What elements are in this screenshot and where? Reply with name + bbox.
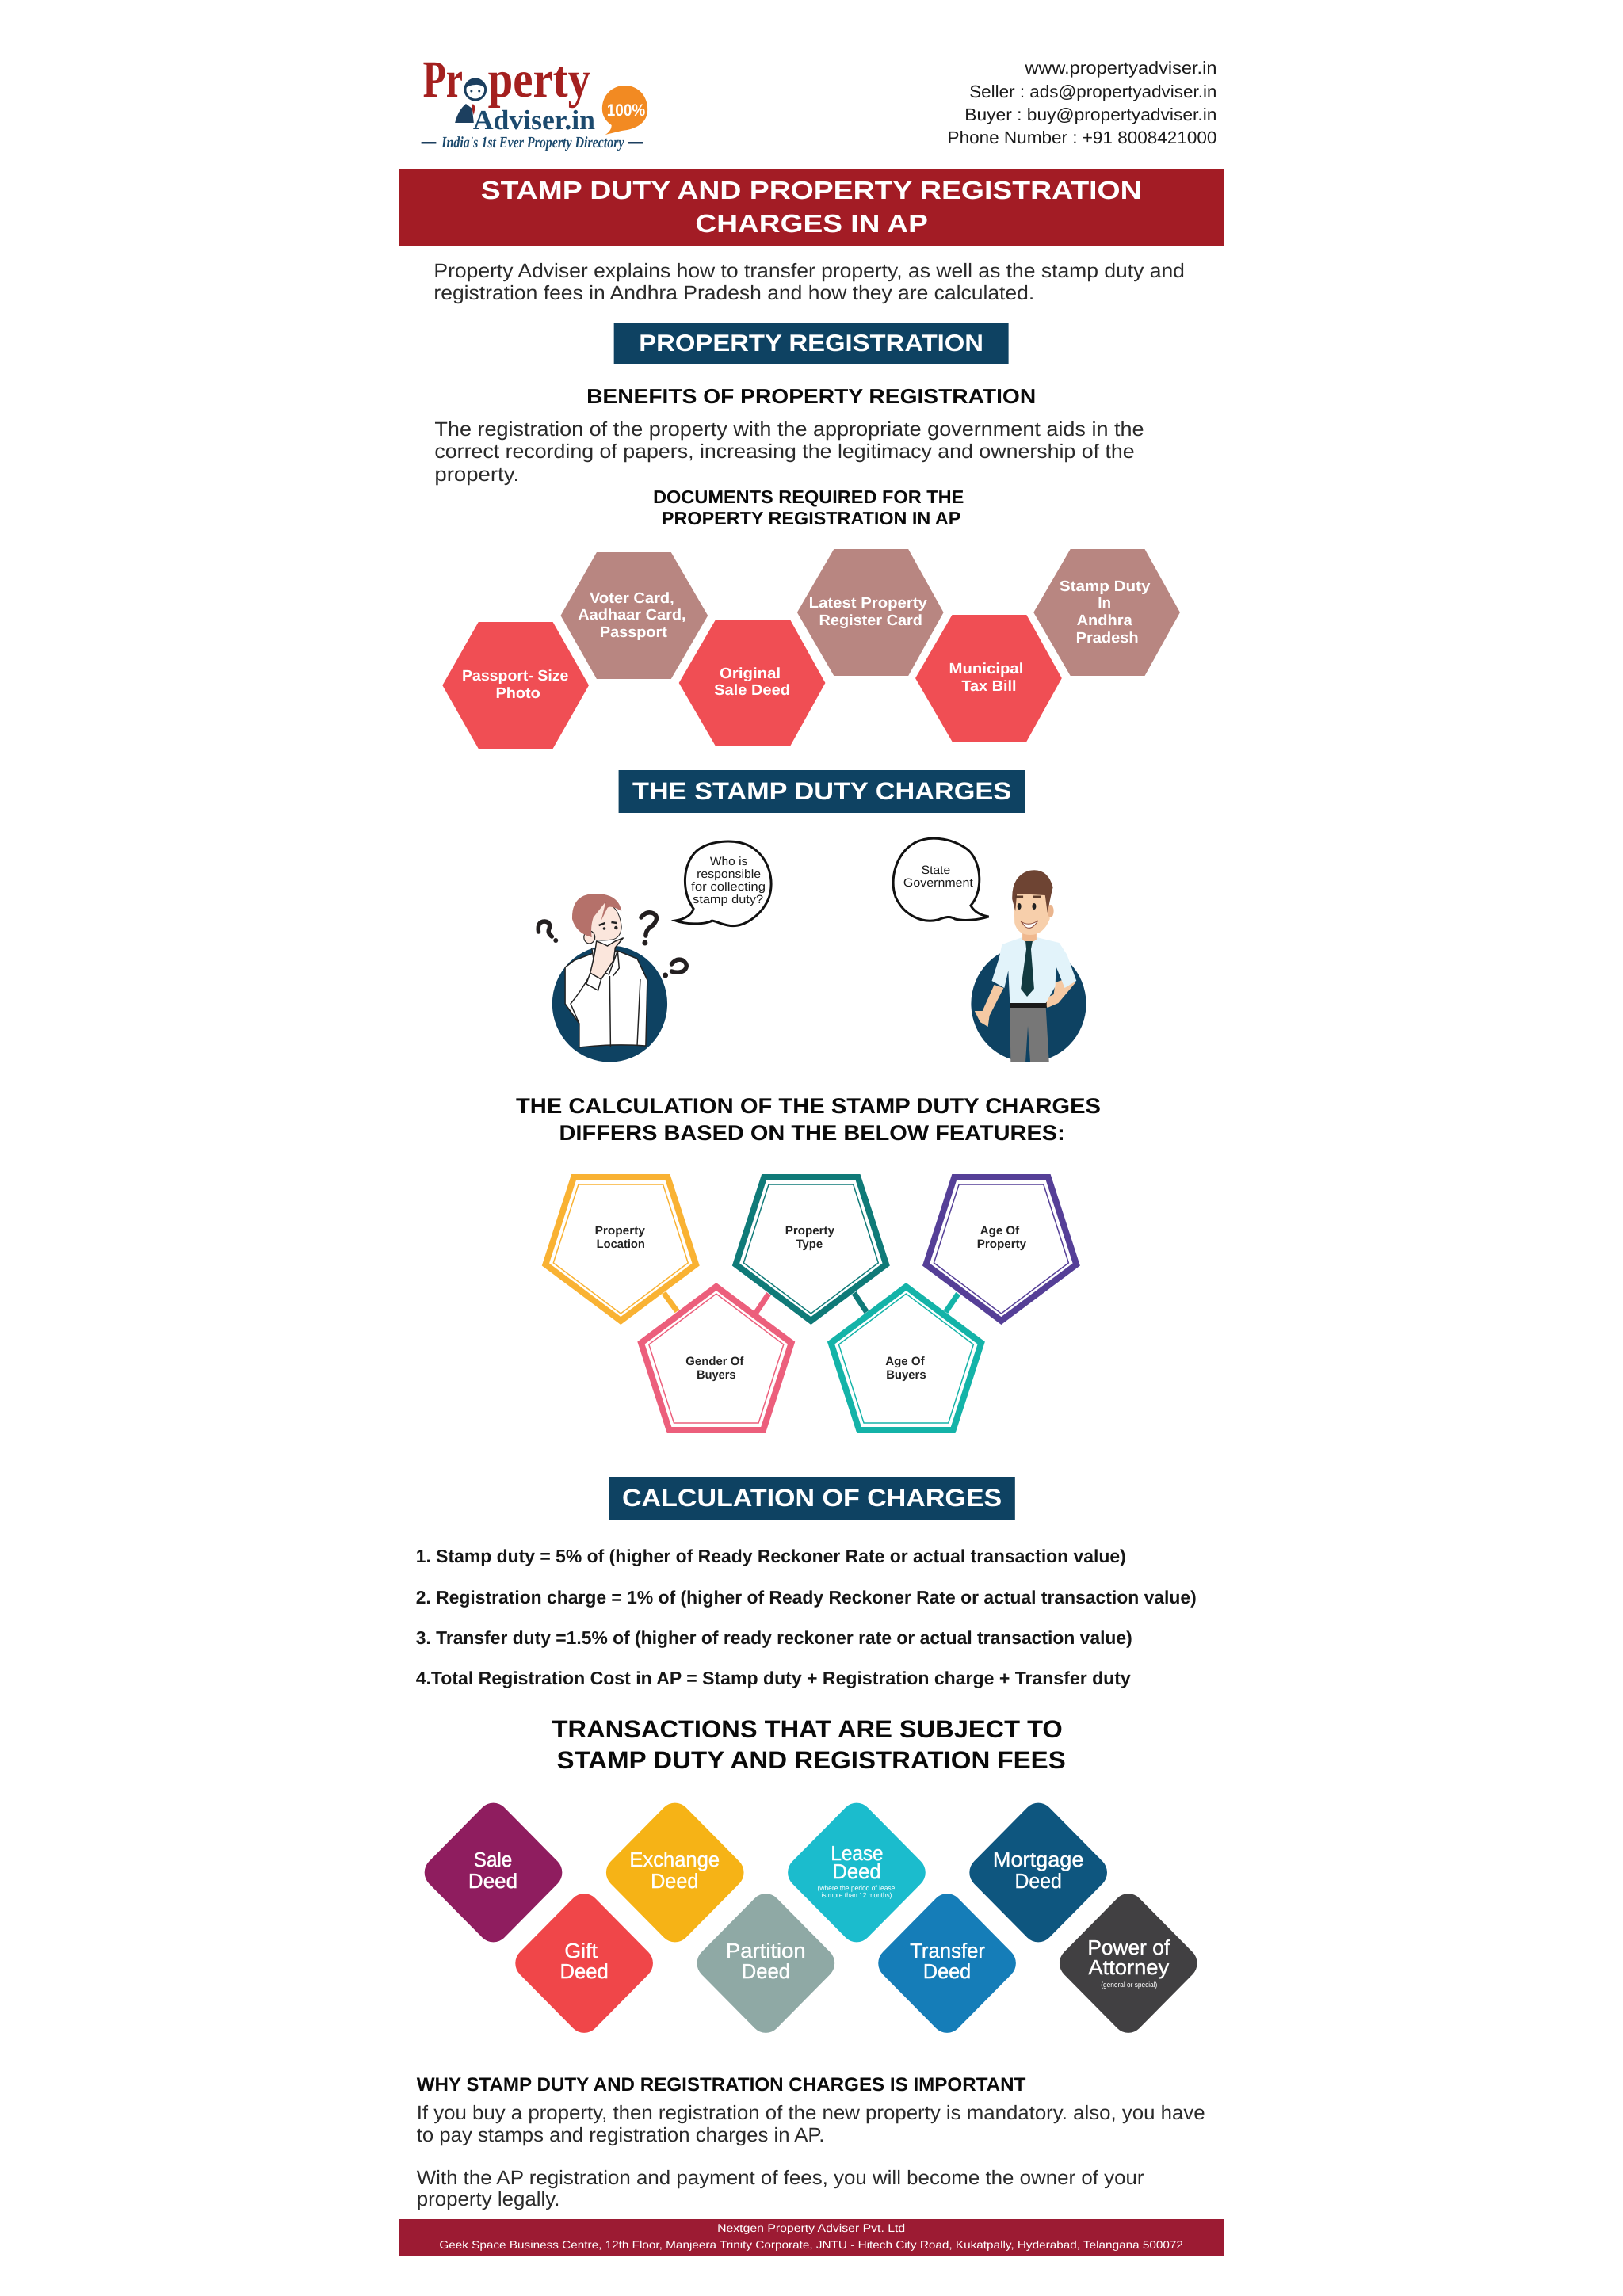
- infographic page: [399, 51, 1224, 2256]
- diamond: power of attorney: (general or special): [1101, 1981, 1157, 1989]
- hexagon: original sale deed: [679, 620, 825, 746]
- shirt: [565, 951, 647, 1047]
- pentagon diagram: features: [545, 1177, 1076, 1430]
- benefits paragraph: [434, 418, 1144, 486]
- closing paragraphs: to pay stamps and registration charges in AP.: [417, 2124, 824, 2146]
- eyes: [599, 922, 617, 925]
- heading: documents required: DOCUMENTS REQUIRED FOR THE: [653, 486, 964, 507]
- calculation formulas list: 4.Total Registration Cost in AP = Stamp duty + Registration charge + Transfer duty: [416, 1668, 1131, 1688]
- diamond: gift deed: Deed: [559, 1959, 609, 1983]
- sleeve cuff: [586, 973, 601, 990]
- ear: [584, 931, 595, 944]
- section heading: property registration: PROPERTY REGISTRATION: [639, 330, 983, 357]
- speech bubble: question: stamp duty?: [693, 893, 763, 906]
- trousers: [1010, 1008, 1049, 1062]
- heading: calculation differs: THE CALCULATION OF THE STAMP DUTY CHARGES: [516, 1094, 1101, 1118]
- hexagon: municipal tax bill: Municipal: [949, 661, 1023, 677]
- pentagon: property type: Type: [796, 1238, 823, 1251]
- circle backdrop: [971, 946, 1086, 1062]
- belt: [1010, 1002, 1047, 1008]
- intro text: registration fees in Andhra Pradesh and how they are calculated.: [433, 282, 1034, 304]
- collar: [592, 948, 619, 976]
- pentagon: gender of buyers: Buyers: [697, 1368, 735, 1382]
- ear: [1048, 905, 1054, 917]
- diamond: power of attorney: Power of: [1087, 1936, 1170, 1959]
- hair: [572, 894, 621, 937]
- diamond: partition deed: Deed: [742, 1959, 790, 1983]
- pentagon: property type: Property: [785, 1224, 835, 1238]
- tie: [1021, 941, 1034, 997]
- pentagon: age of buyers: [831, 1287, 981, 1430]
- logo: Property Adviser: [422, 51, 647, 151]
- contact details: www.propertyadviser.in: [1024, 58, 1216, 78]
- calculation formulas list: 3. Transfer duty =1.5% of (higher of ready reckoner rate or actual transaction value): [416, 1627, 1132, 1648]
- closing paragraphs: property legally.: [417, 2188, 559, 2210]
- logo badge: 100%: 100%: [607, 101, 645, 120]
- logo wordmark: Property: Pr: [423, 51, 463, 109]
- pentagon: property location: [545, 1177, 696, 1321]
- hexagon: passport size photo: [442, 622, 589, 749]
- closing paragraphs: [417, 2102, 1205, 2210]
- right arm: [1043, 979, 1075, 1008]
- pentagon: gender of buyers: [641, 1287, 792, 1430]
- logo badge: 100%: [602, 86, 647, 135]
- closing paragraphs: With the AP registration and payment of fees, you will become the owner of your: [417, 2167, 1144, 2189]
- contact details: Seller : ads@propertyadviser.in: [969, 82, 1216, 101]
- logo wordmark: Adviser.in: Adviser.in: [473, 105, 595, 135]
- calculation formulas list: 1. Stamp duty = 5% of (higher of Ready Reckoner Rate or actual transaction value): [416, 1546, 1126, 1566]
- footer bar: Geek Space Business Centre, 12th Floor, Manjeera Trinity Corporate, JNTU - Hitech City Road, Kukatpally, Hyderabad, Telangana 500072: [439, 2238, 1183, 2251]
- contact details: Phone Number : +91 8008421000: [948, 128, 1216, 147]
- hexagon: stamp duty in andhra pradesh: In: [1098, 595, 1111, 612]
- contact details: [948, 58, 1216, 147]
- intro text: Property Adviser explains how to transfer property, as well as the stamp duty and: [433, 260, 1185, 282]
- diamond: exchange deed: Exchange: [629, 1848, 720, 1871]
- speech bubble: answer: [893, 838, 989, 921]
- section heading: property registration: [614, 323, 1009, 364]
- hexagon: stamp duty in andhra pradesh: Stamp Duty: [1060, 578, 1151, 595]
- logo wordmark: Property: [423, 51, 590, 109]
- smile: [1021, 921, 1038, 928]
- heading: transactions: STAMP DUTY AND REGISTRATION FEES: [557, 1746, 1066, 1774]
- question marks: [538, 913, 686, 972]
- diamond: gift deed: [509, 1887, 659, 2039]
- diamond: lease deed: [781, 1796, 932, 1949]
- diamond: power of attorney: Attorney: [1088, 1955, 1169, 1979]
- diamond: transfer deed: Transfer: [910, 1939, 985, 1962]
- diamond: gift deed: Gift: [564, 1939, 598, 1962]
- speech bubble: question: for collecting: [691, 880, 766, 894]
- heading: why important: WHY STAMP DUTY AND REGISTRATION CHARGES IS IMPORTANT: [417, 2074, 1026, 2096]
- diamond: mortgage deed: Deed: [1015, 1869, 1062, 1893]
- speech bubble: question: Who is: [710, 855, 747, 868]
- hexagon: voter card: Passport: [600, 624, 668, 641]
- benefits paragraph: correct recording of papers, increasing the legitimacy and ownership of the: [434, 441, 1135, 463]
- pentagon: gender of buyers: Gender Of: [685, 1355, 744, 1368]
- hexagon: stamp duty in andhra pradesh: Pradesh: [1076, 630, 1139, 646]
- speech bubble: answer: Government: [903, 876, 974, 890]
- hexagon: stamp duty in andhra pradesh: Andhra: [1077, 612, 1132, 629]
- hexagon: voter card: Aadhaar Card,: [578, 607, 686, 624]
- hexagon: stamp duty in andhra pradesh: [1033, 549, 1180, 676]
- hand on chin: [590, 938, 623, 979]
- logo icon: adviser face: [465, 78, 486, 100]
- closing paragraphs: If you buy a property, then registration of the new property is mandatory. also, you have: [417, 2102, 1205, 2124]
- diamond: sale deed: [418, 1796, 569, 1949]
- connector: age of buyers to age of property: [945, 1294, 958, 1312]
- logo tagline: India's 1st Ever Property Directory: [441, 134, 624, 151]
- hexagon: municipal tax bill: Tax Bill: [961, 678, 1016, 695]
- circle backdrop: [552, 946, 667, 1062]
- logo wordmark: Property: perty: [488, 51, 590, 109]
- hexagon: latest property register card: [797, 549, 944, 676]
- diamond: partition deed: [690, 1887, 841, 2039]
- heading: transactions: TRANSACTIONS THAT ARE SUBJECT TO: [552, 1715, 1063, 1743]
- neck: [1022, 927, 1037, 944]
- diamond: power of attorney: [1053, 1887, 1204, 2039]
- contact details: Buyer : buy@propertyadviser.in: [964, 105, 1216, 124]
- pentagon: age of property: [926, 1177, 1076, 1321]
- pentagon: age of buyers: Age Of: [885, 1355, 926, 1368]
- hexagon: voter card: Voter Card,: [590, 590, 674, 607]
- hexagon chain: documents: [442, 549, 1180, 749]
- heading: transactions: [552, 1715, 1066, 1774]
- section heading: stamp duty charges: [619, 770, 1025, 813]
- hexagon: passport size photo: Passport- Size: [462, 668, 568, 685]
- logo icon: suit and tie: [455, 104, 475, 123]
- intro text: [433, 260, 1185, 304]
- connector: type to age of buyers: [854, 1293, 866, 1312]
- speech bubble: question: [675, 841, 771, 926]
- pentagon: age of buyers: Buyers: [886, 1368, 926, 1382]
- pentagon: property location: Location: [597, 1238, 645, 1251]
- illustration: thinking man: [538, 894, 686, 1062]
- diamond: mortgage deed: Mortgage: [993, 1848, 1083, 1871]
- hexagon: latest property register card: Register Card: [819, 612, 922, 629]
- pentagon: property type: [735, 1177, 886, 1321]
- footer bar: Nextgen Property Adviser Pvt. Ltd: [717, 2222, 905, 2234]
- section heading: calculation of charges: [609, 1477, 1015, 1520]
- heading: benefits: BENEFITS OF PROPERTY REGISTRATION: [586, 384, 1036, 408]
- calculation formulas list: 2. Registration charge = 1% of (higher of Ready Reckoner Rate or actual transaction value): [416, 1587, 1197, 1608]
- title banner: CHARGES IN AP: [695, 209, 928, 238]
- heading: calculation differs: [516, 1094, 1101, 1145]
- diamond: transfer deed: Deed: [923, 1959, 971, 1983]
- hexagon: passport size photo: Photo: [495, 685, 540, 702]
- hexagon: municipal tax bill: [915, 615, 1062, 742]
- hexagon: voter card: [560, 552, 708, 679]
- benefits paragraph: property.: [434, 463, 519, 486]
- diamond: sale deed: Deed: [468, 1869, 517, 1893]
- connector: location to gender: [664, 1293, 677, 1311]
- shirt: [992, 937, 1076, 1003]
- heading: calculation differs: DIFFERS BASED ON THE BELOW FEATURES:: [559, 1121, 1065, 1145]
- heading: documents required: [653, 486, 964, 528]
- speech bubble: answer: State: [922, 864, 950, 877]
- diamond: mortgage deed: [963, 1796, 1113, 1949]
- eyebrows and eyes: [1015, 895, 1041, 898]
- heading: documents required: PROPERTY REGISTRATION IN AP: [662, 508, 960, 528]
- hexagon: original sale deed: Original: [720, 666, 781, 682]
- hexagon: latest property register card: Latest Property: [809, 595, 927, 612]
- title banner: [399, 169, 1224, 246]
- left arm: [975, 985, 1003, 1027]
- diamond: sale deed: Sale: [474, 1848, 512, 1871]
- face: [586, 902, 621, 940]
- section heading: stamp duty charges: THE STAMP DUTY CHARGES: [632, 777, 1011, 805]
- connector: gender to type: [755, 1294, 769, 1314]
- diamond grid: deeds: [418, 1796, 1204, 2039]
- diamond: lease deed: Lease: [831, 1841, 884, 1865]
- head: [1014, 891, 1050, 935]
- hair: [1012, 870, 1053, 913]
- diamond: lease deed: Deed: [832, 1859, 881, 1883]
- shirt lines: [571, 976, 640, 1047]
- title banner: STAMP DUTY AND PROPERTY REGISTRATION: [481, 176, 1142, 204]
- calculation formulas list: [416, 1546, 1197, 1688]
- diamond: lease deed: (where the period of lease: [818, 1884, 895, 1892]
- diamond: transfer deed: [872, 1887, 1022, 2039]
- section heading: calculation of charges: CALCULATION OF CHARGES: [622, 1484, 1002, 1512]
- diamond: exchange deed: [600, 1796, 750, 1949]
- diamond: exchange deed: Deed: [651, 1869, 698, 1893]
- hexagon: original sale deed: Sale Deed: [714, 682, 790, 699]
- illustration: smiling man: [971, 870, 1086, 1062]
- speech bubble: question: responsible: [697, 868, 761, 881]
- diamond: partition deed: Partition: [726, 1939, 806, 1962]
- pentagon: age of property: Property: [977, 1238, 1027, 1251]
- pentagon: age of property: Age Of: [980, 1224, 1020, 1238]
- benefits paragraph: The registration of the property with the appropriate government aids in the: [434, 418, 1144, 441]
- footer bar: [399, 2219, 1224, 2256]
- pentagon: property location: Property: [595, 1224, 646, 1238]
- diamond: lease deed: is more than 12 months): [821, 1891, 892, 1899]
